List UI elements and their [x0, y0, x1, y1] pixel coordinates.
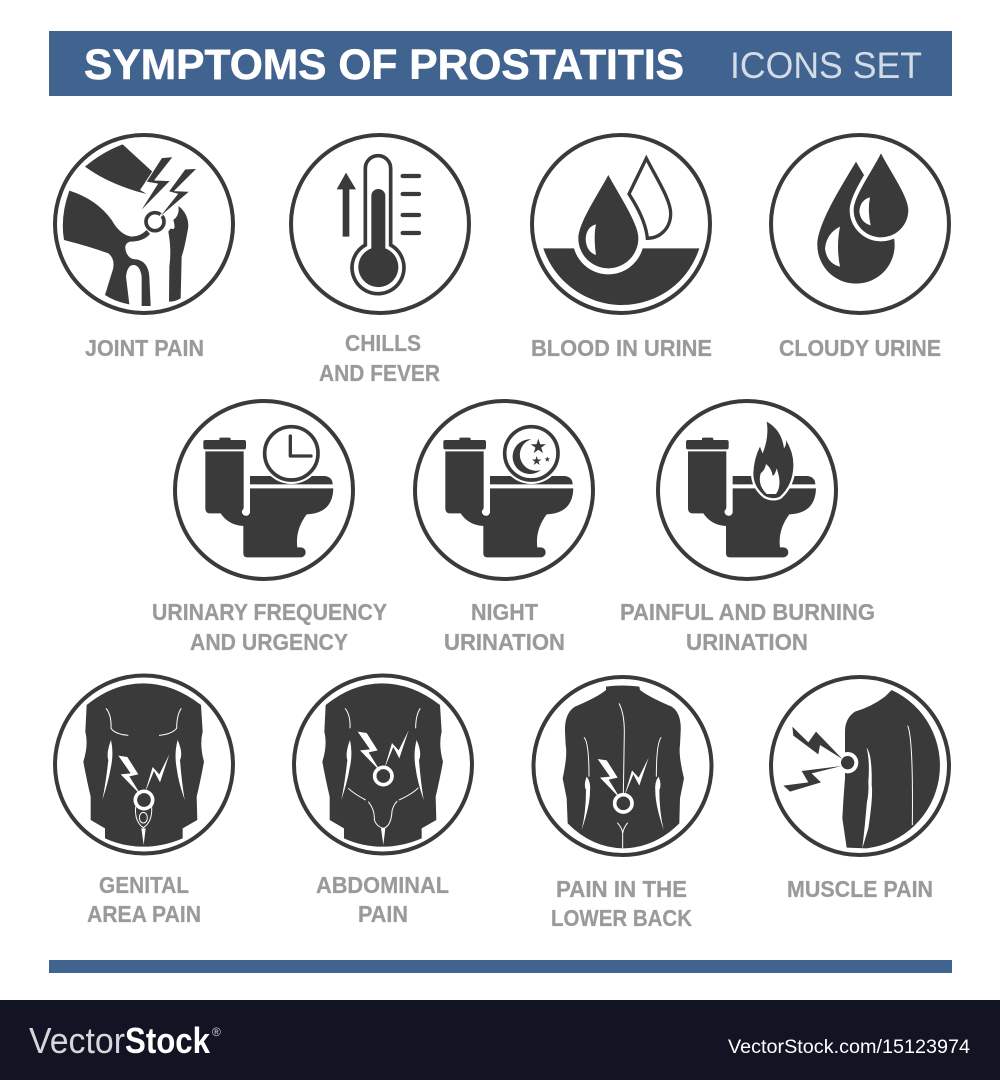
- label: pain in the lower back: LOWER BACK: [551, 905, 692, 931]
- panel: joint pain: [55, 135, 233, 361]
- panel: urinary frequency and urgency: [152, 401, 387, 655]
- bottom rule: [49, 960, 952, 973]
- label: blood in urine: BLOOD IN URINE: [531, 335, 712, 361]
- panel: cloudy urine: [771, 135, 949, 361]
- label: pain in the lower back: [551, 876, 692, 931]
- label: abdominal pain: ABDOMINAL: [316, 872, 449, 898]
- icon: hip joint with lightning: [63, 144, 197, 306]
- label: chills and fever: AND FEVER: [319, 360, 440, 386]
- label: genital area pain: AREA PAIN: [87, 901, 201, 927]
- watermark url: VectorStock.com/15123974: [728, 1037, 970, 1058]
- footer bar: [0, 1000, 1000, 1080]
- label: muscle pain: MUSCLE PAIN: [787, 876, 933, 902]
- label: night urination: URINATION: [444, 629, 565, 655]
- label: urinary frequency and urgency: AND URGENCY: [190, 629, 348, 655]
- label: night urination: [444, 599, 565, 655]
- watermark logo: ®: [212, 1025, 221, 1039]
- panel: night urination: [415, 401, 593, 655]
- watermark logo: [29, 1020, 221, 1061]
- label: genital area pain: GENITAL: [99, 872, 189, 898]
- icon: front torso with genital pain: [83, 683, 204, 847]
- panel: pain in the lower back: [534, 677, 712, 931]
- watermark logo: Vector: [29, 1020, 125, 1061]
- label: genital area pain: [87, 872, 201, 927]
- icon: back torso with lower back pain: [563, 685, 684, 848]
- panel: genital area pain: [55, 676, 233, 927]
- label: abdominal pain: PAIN: [358, 901, 408, 927]
- panel: chills and fever: [291, 135, 469, 386]
- panel: abdominal pain: [294, 676, 472, 927]
- icon: cloudy drops: [817, 153, 908, 284]
- subtitle: icons set: ICONS SET: [730, 45, 922, 86]
- icon: blood drops: [543, 158, 699, 305]
- header banner: [49, 31, 952, 96]
- panel: muscle pain: [771, 677, 949, 902]
- label: chills and fever: CHILLS: [345, 330, 421, 356]
- label: cloudy urine: CLOUDY URINE: [779, 335, 941, 361]
- label: painful and burning urination: PAINFUL AND BURNING: [620, 599, 875, 625]
- title: SYMPTOMS OF PROSTATITIS: [84, 41, 684, 89]
- icon: side torso with muscle pain: [783, 690, 940, 848]
- label: pain in the lower back: PAIN IN THE: [556, 876, 687, 902]
- panel: blood in urine: [531, 135, 712, 361]
- icon: toilet with moon and stars: [443, 423, 573, 557]
- label: joint pain: JOINT PAIN: [85, 335, 204, 361]
- watermark logo: Stock: [125, 1020, 211, 1061]
- label: urinary frequency and urgency: URINARY FREQUENCY: [152, 599, 387, 625]
- label: night urination: NIGHT: [471, 599, 538, 625]
- label: painful and burning urination: [620, 599, 875, 655]
- label: urinary frequency and urgency: [152, 599, 387, 655]
- label: chills and fever: [319, 330, 440, 386]
- icon: thermometer: [337, 156, 419, 294]
- label: painful and burning urination: URINATION: [686, 629, 808, 655]
- panel: painful and burning urination: [620, 401, 875, 655]
- label: abdominal pain: [316, 872, 449, 927]
- icon: toilet with clock: [203, 423, 333, 557]
- icon: toilet with flame: [686, 422, 816, 557]
- icon: front torso with abdominal pain: [322, 683, 443, 847]
